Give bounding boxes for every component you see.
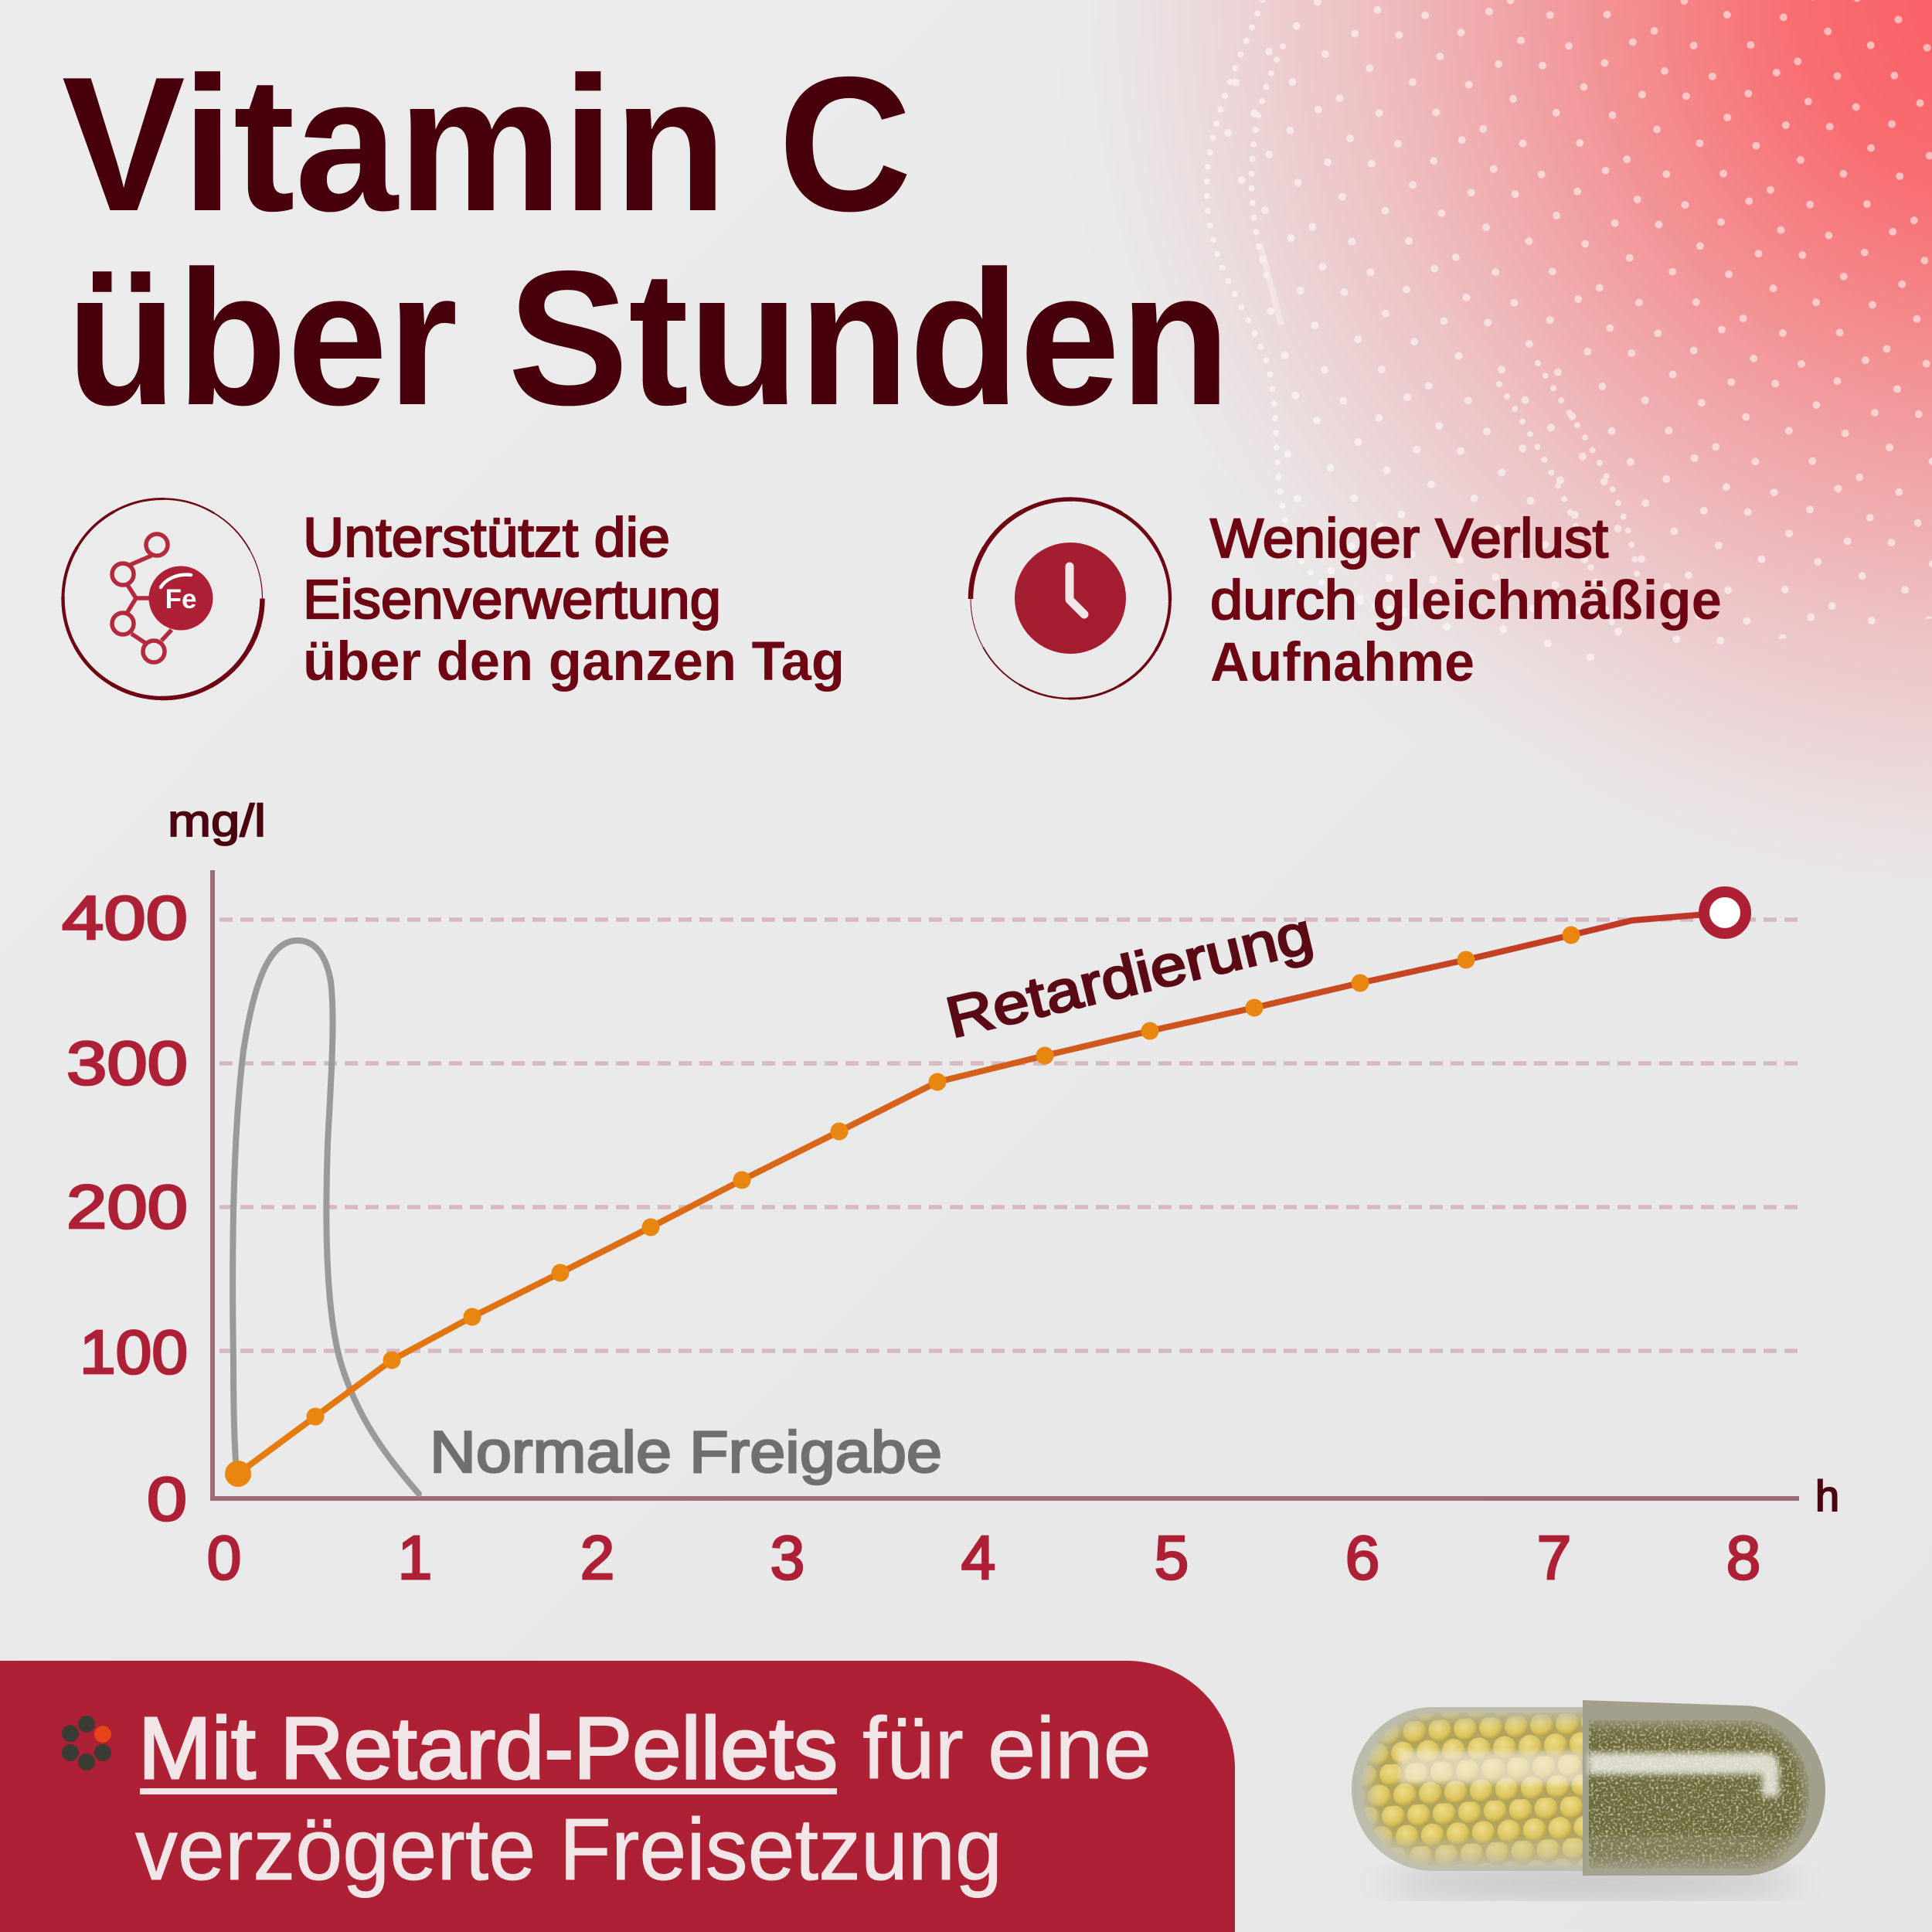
axes — [213, 870, 1799, 1498]
text block: less loss: durch — [1210, 570, 1357, 631]
x axis labels — [207, 1523, 1760, 1592]
text block: iron utilisation: Unterstützt die — [303, 508, 670, 569]
y axis labels: 200 — [66, 1172, 188, 1241]
x axis labels: 0 — [207, 1523, 241, 1592]
text block: less loss: gleichmäßige — [1372, 570, 1722, 631]
curve: retard release — [225, 892, 1746, 1487]
icon: pellet ring — [62, 1716, 111, 1770]
callout text — [135, 1699, 1151, 1898]
text block: less loss — [1210, 509, 1722, 693]
chart: vitamin C release over time — [62, 796, 1839, 1592]
y axis labels: 100 — [80, 1318, 188, 1386]
title: über Stunden — [66, 230, 1230, 445]
x axis labels: 4 — [961, 1523, 995, 1592]
icon: iron molecule: Fe — [165, 584, 196, 614]
x axis labels: 6 — [1345, 1523, 1379, 1592]
panel: retard pellets callout — [0, 1661, 1235, 1932]
x axis labels: 3 — [770, 1523, 804, 1592]
y axis labels: 400 — [62, 883, 188, 952]
x axis labels: 1 — [398, 1523, 432, 1592]
y axis labels: 0 — [147, 1464, 187, 1533]
label: retard release: Retardierung — [940, 900, 1318, 1050]
callout text: Mit Retard-Pellets — [138, 1699, 838, 1797]
title: Vitamin C — [62, 36, 912, 251]
x axis labels: 7 — [1537, 1523, 1571, 1592]
text block: iron utilisation — [303, 508, 845, 692]
x axis unit: h — [1815, 1471, 1839, 1520]
curve: normal release — [233, 940, 419, 1494]
y axis unit: mg/l — [168, 796, 266, 846]
capsule with pellets and powder — [1352, 1700, 1830, 1898]
callout text: verzögerte Freisetzung — [135, 1801, 1002, 1898]
text block: less loss: Weniger Verlust — [1210, 509, 1608, 570]
x axis labels: 2 — [580, 1523, 614, 1592]
text block: iron utilisation: über den ganzen Tag — [303, 631, 845, 692]
title — [62, 36, 1230, 445]
label: normal release: Normale Freigabe — [430, 1420, 942, 1485]
y axis labels — [62, 883, 188, 1533]
icon: clock — [971, 499, 1170, 699]
x axis labels: 8 — [1726, 1523, 1760, 1592]
text block: iron utilisation: Eisenverwertung — [303, 570, 721, 631]
y axis labels: 300 — [66, 1029, 188, 1097]
text block: less loss: Aufnahme — [1210, 632, 1475, 693]
x axis labels: 5 — [1155, 1523, 1189, 1592]
decorative dotted sphere — [1207, 0, 1932, 663]
icon: iron molecule — [63, 499, 263, 699]
callout text: für eine — [862, 1699, 1151, 1797]
